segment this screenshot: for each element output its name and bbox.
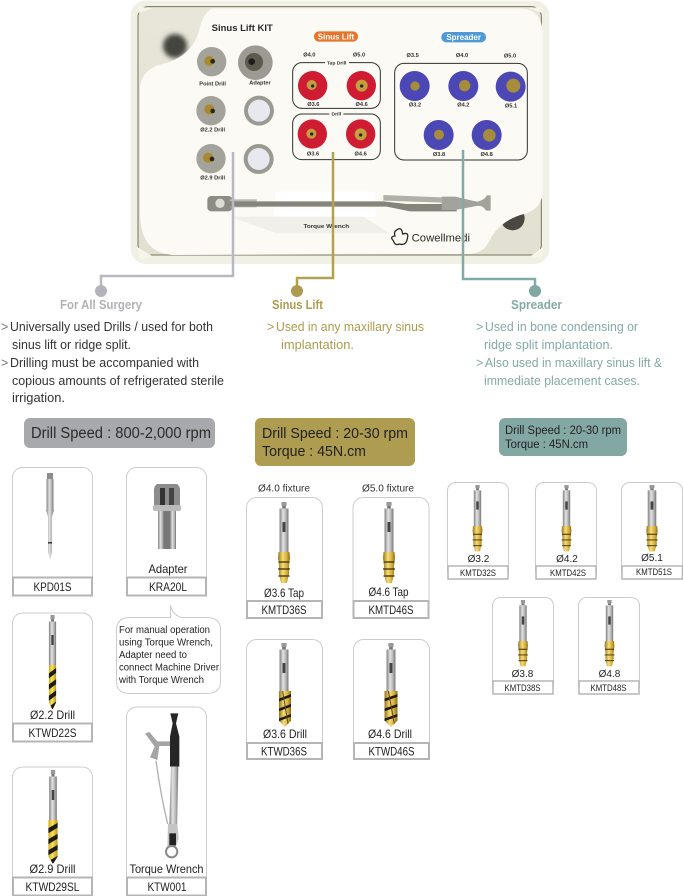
text: spreader notes: ridge split implantation.	[484, 338, 613, 352]
text: for all surgery notes	[1, 320, 224, 405]
card: KMTD42S: Ø4.2	[556, 554, 578, 565]
callout: spreader drill speed: Drill Speed : 20-30 rpm	[505, 425, 621, 437]
photo: sinus lift kit tray: Drill	[331, 111, 342, 117]
photo: sinus lift kit tray: Ø4.0	[456, 53, 468, 59]
card: KMTD32S	[448, 482, 508, 579]
photo: sinus lift kit tray: Ø4.2	[457, 103, 469, 109]
photo: sinus lift kit tray: Ø4.8	[481, 152, 493, 158]
card: KMTD46S 4.6 tap: KMTD46S	[368, 605, 414, 617]
label: 4.0 fixture: Ø4.0 fixture	[258, 482, 310, 494]
photo: sinus lift kit tray: Ø5.1	[505, 103, 517, 109]
photo: sinus lift kit tray: Ø2.2 Drill	[200, 127, 226, 133]
photo: sinus lift kit tray	[131, 1, 549, 264]
photo: sinus lift kit tray: Ø5.0	[353, 52, 365, 58]
photo: sinus lift kit tray: Sinus Lift	[318, 32, 355, 41]
card: KTWD36S 3.6 drill: KTWD36S	[261, 746, 307, 758]
card: KTW001 torque wrench	[126, 707, 206, 896]
torque wrench in tray	[207, 196, 232, 211]
boxes	[293, 63, 527, 160]
card: KMTD51S	[622, 482, 682, 579]
card: KTWD46S 4.6 drill: Ø4.6 Drill	[368, 727, 412, 741]
card: KTWD29SL 2.9 drill: KTWD29SL	[26, 880, 80, 894]
card: KMTD38S	[492, 598, 554, 694]
connector: spreader	[463, 150, 541, 297]
text: sinus lift notes	[267, 320, 424, 352]
photo: sinus lift kit tray: Ø3.8	[433, 152, 445, 158]
card: KRA20L adapter	[126, 468, 206, 596]
card: KTW001 torque wrench: Torque Wrench	[130, 862, 204, 876]
text: sinus lift notes: >	[267, 320, 274, 334]
logo: Cowellmedi	[392, 229, 470, 245]
callout: spreader drill speed: Torque : 45N.cm	[505, 439, 588, 451]
photo: sinus lift kit tray: Ø5.0	[504, 53, 516, 59]
text: for all surgery notes: Universally used Drills / used for both	[10, 320, 213, 334]
photo: sinus lift kit tray: Ø2.9 Drill	[200, 176, 226, 182]
heading: sinus lift: Sinus Lift	[272, 298, 324, 312]
callout: spreader drill speed	[499, 418, 627, 456]
callout: adapter note: Adapter need to	[119, 650, 187, 661]
card: KRA20L adapter: Adapter	[148, 562, 188, 576]
card: KMTD51S: KMTD51S	[636, 567, 672, 578]
text: spreader notes: >	[476, 320, 483, 334]
card: KTWD22S 2.2 drill	[12, 613, 92, 742]
blue holders	[400, 71, 526, 150]
callout: adapter note	[116, 605, 220, 694]
card: KTWD46S 4.6 drill: KTWD46S	[368, 746, 415, 758]
card: KTWD36S 3.6 drill: Ø3.6 Drill	[263, 727, 307, 741]
card: KMTD48S: Ø4.8	[599, 669, 621, 680]
text: spreader notes: immediate placement cases.	[484, 374, 640, 388]
callout: drill speed 800-2000: Drill Speed : 800-2,000 rpm	[31, 425, 211, 442]
photo: sinus lift kit tray: Ø3.6	[307, 102, 319, 108]
card: KTWD29SL 2.9 drill	[12, 767, 92, 896]
connector: sinus lift	[291, 152, 333, 297]
photo: sinus lift kit tray: Ø3.6	[307, 151, 319, 157]
card: KMTD46S 4.6 tap: Ø4.6 Tap	[368, 585, 409, 599]
card: KMTD32S: Ø3.2	[468, 554, 490, 565]
text: for all surgery notes: Drilling must be accompanied with	[10, 356, 199, 370]
photo: sinus lift kit tray: Ø4.6	[355, 151, 367, 157]
card: KTWD22S 2.2 drill: Ø2.2 Drill	[30, 708, 75, 722]
photo: sinus lift kit tray: Ø4.0	[303, 52, 315, 58]
text: spreader notes: Also used in maxillary sinus lift &	[485, 356, 663, 370]
photo: sinus lift kit tray: Ø3.5	[407, 53, 419, 59]
photo: sinus lift kit tray: Spreader	[446, 33, 481, 42]
photo: sinus lift kit tray: Torque Wrench	[303, 224, 350, 230]
card: KMTD51S: Ø5.1	[641, 553, 663, 564]
gray holders	[197, 47, 226, 76]
card: KMTD42S: KMTD42S	[550, 568, 586, 579]
callout: drill speed 800-2000	[24, 418, 215, 448]
card: KTW001 torque wrench: KTW001	[148, 880, 187, 894]
callout: adapter note: with Torque Wrench	[118, 675, 204, 686]
photo: sinus lift kit tray: Sinus Lift KIT	[212, 23, 273, 34]
card: KRA20L adapter: KRA20L	[149, 580, 187, 594]
connector: all surgery	[95, 152, 233, 297]
callout: adapter note: using Torque Wrench,	[119, 638, 213, 648]
text: for all surgery notes: copious amounts of refrigerated sterile	[12, 374, 224, 388]
photo: sinus lift kit tray: Adapter	[249, 81, 271, 87]
card: KTWD46S 4.6 drill	[354, 640, 430, 759]
text: for all surgery notes: sinus lift or ridge split.	[12, 338, 131, 352]
text: sinus lift notes: Used in any maxillary sinus	[276, 320, 424, 334]
photo: sinus lift kit tray: Ø3.2	[409, 103, 421, 109]
tray pills	[314, 31, 358, 42]
card: KTWD36S 3.6 drill	[246, 640, 322, 759]
heading: for all surgery: For All Surgery	[60, 298, 142, 312]
callout: sinus lift drill speed: Torque : 45N.cm	[262, 444, 366, 460]
card: KMTD42S	[536, 482, 596, 579]
card: KMTD48S	[578, 598, 640, 694]
text: spreader notes: Used in bone condensing or	[485, 320, 638, 334]
text: sinus lift notes: implantation.	[281, 338, 354, 352]
card: KMTD36S 3.6 tap: Ø3.6 Tap	[264, 586, 304, 600]
text: for all surgery notes: >	[1, 320, 8, 334]
logo: Cowellmedi: Cowellmedi	[412, 232, 470, 244]
photo: sinus lift kit tray: Point Drill	[199, 81, 226, 87]
card: KTWD22S 2.2 drill: KTWD22S	[28, 726, 76, 740]
card: KMTD46S 4.6 tap	[353, 498, 429, 618]
text: spreader notes: >	[476, 356, 483, 370]
card: KMTD32S: KMTD32S	[460, 568, 496, 579]
card: KMTD38S: KMTD38S	[504, 683, 540, 694]
callout: sinus lift drill speed: Drill Speed : 20-30 rpm	[262, 426, 408, 442]
text: for all surgery notes: >	[1, 356, 8, 370]
red holders	[298, 71, 376, 149]
card: KMTD48S: KMTD48S	[590, 683, 626, 694]
callout: sinus lift drill speed	[255, 418, 415, 466]
photo: sinus lift kit tray: Tap Drill	[327, 60, 347, 66]
callout: adapter note: connect Machine Driver	[119, 662, 220, 674]
photo: sinus lift kit tray: Ø4.6	[356, 102, 368, 108]
heading: spreader: Spreader	[511, 298, 562, 312]
card: KMTD38S: Ø3.8	[512, 669, 534, 680]
card: KMTD36S 3.6 tap	[246, 498, 322, 618]
text: for all surgery notes: irrigation.	[12, 391, 65, 405]
card: KTWD29SL 2.9 drill: Ø2.9 Drill	[30, 862, 76, 876]
card: KMTD36S 3.6 tap: KMTD36S	[262, 605, 307, 617]
callout: adapter note: For manual operation	[119, 625, 210, 636]
text: spreader notes	[476, 320, 663, 388]
label: 5.0 fixture: Ø5.0 fixture	[362, 482, 414, 494]
card: KPD01S point drill: KPD01S	[34, 580, 72, 594]
card: KPD01S point drill	[12, 468, 92, 596]
